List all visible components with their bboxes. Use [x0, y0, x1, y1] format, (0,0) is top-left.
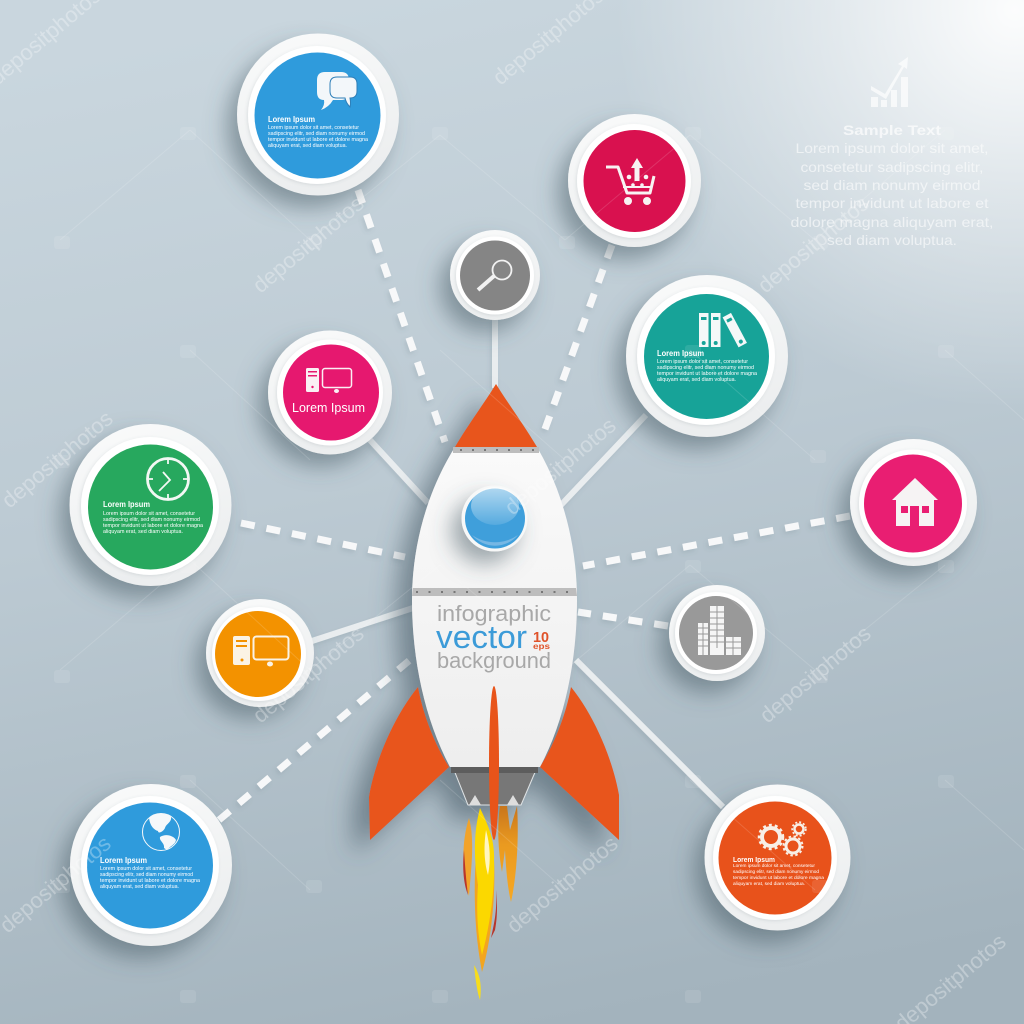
label: Lorem Ipsum: [292, 401, 365, 415]
text block: tempor invidunt ut labore et dolore magna: [733, 875, 824, 881]
watermark pattern: depositphotos: [248, 621, 369, 728]
watermark pattern: depositphotos: [0, 406, 118, 513]
connector lines: [219, 190, 850, 820]
text block: Lorem Ipsum: [657, 349, 704, 358]
rocket label: vector: [436, 619, 527, 655]
exhaust flame: [463, 806, 518, 1000]
circle: green clock: [70, 424, 232, 586]
body text: sed diam voluptua.: [827, 232, 957, 248]
nose cone: [455, 384, 537, 447]
watermark pattern: depositphotos: [753, 191, 874, 298]
text block: aliquyam erat, sed diam voluptua.: [100, 884, 179, 890]
text block: tempor invidunt ut labore et dolore magna: [100, 878, 200, 884]
icon: house: [892, 478, 938, 526]
circle: home: [850, 439, 977, 566]
icon: globe: [142, 814, 180, 850]
circle: gears: [704, 784, 850, 930]
text block: [100, 856, 200, 890]
watermark pattern: depositphotos: [755, 621, 876, 728]
icon: magnifier: [478, 260, 512, 290]
icon: growth chart: [871, 57, 908, 107]
icon: cart: [606, 158, 654, 205]
rocket label: [436, 601, 551, 673]
text block: [657, 349, 757, 383]
text block: sadipscing elitr, sed diam nonumy eirmod: [733, 869, 819, 875]
rocket label: infographic: [437, 601, 551, 626]
left fin: [369, 687, 449, 840]
text block: tempor invidunt ut labore et dolore magna: [103, 523, 203, 529]
text block: [733, 857, 824, 887]
icon: buildings: [698, 606, 741, 655]
circle: orange computer: [206, 599, 314, 707]
icon: clock: [148, 458, 188, 500]
circle: cart: [568, 114, 701, 247]
text block: aliquyam erat, sed diam voluptua.: [657, 377, 736, 383]
lower rivet band: [412, 588, 577, 596]
text block: [268, 115, 368, 149]
text block: Lorem Ipsum: [733, 857, 775, 864]
dashed connectors: [219, 190, 850, 820]
sample text block: [790, 57, 994, 248]
text block: Lorem Ipsum: [100, 856, 147, 865]
circle: chat: [237, 34, 399, 196]
text block: Lorem ipsum dolor sit amet, consetetur: [103, 511, 195, 517]
rocket: [369, 384, 619, 1000]
icon: computer: [306, 368, 352, 393]
text block: aliquyam erat, sed diam voluptua.: [733, 881, 805, 887]
watermark pattern: depositphotos: [500, 413, 621, 520]
icon: speech bubbles: [317, 72, 357, 110]
body text: tempor invidunt ut labore et: [796, 195, 989, 211]
text block: sadipscing elitr, sed diam nonumy eirmod: [268, 131, 365, 137]
heading: Sample Text: [843, 122, 941, 138]
text block: Lorem ipsum dolor sit amet, consetetur: [733, 863, 815, 869]
body text: Lorem ipsum dolor sit amet,: [796, 140, 988, 156]
circle: globe: [70, 784, 232, 946]
body text: consetetur sadipscing elitr,: [800, 159, 984, 175]
porthole: [462, 486, 528, 552]
rocket label: eps: [533, 642, 551, 651]
text block: sadipscing elitr, sed diam nonumy eirmod: [103, 517, 200, 523]
rocket silhouette with shadow: [369, 384, 619, 840]
right fin: [540, 687, 619, 840]
icon: computer: [233, 636, 288, 666]
body text: sed diam nonumy eirmod: [804, 177, 980, 193]
circle: binders: [626, 275, 788, 437]
text block: [103, 500, 203, 535]
text block: Lorem ipsum dolor sit amet, consetetur: [100, 866, 192, 872]
icon: binders: [699, 313, 747, 347]
circle: pink computer: [268, 330, 392, 454]
text block: sadipscing elitr, sed diam nonumy eirmod: [100, 872, 193, 878]
text block: Lorem Ipsum: [103, 500, 150, 509]
body: [412, 447, 577, 767]
text block: aliquyam erat, sed diam voluptua.: [268, 143, 347, 149]
centre fin: [489, 686, 499, 840]
text block: tempor invidunt ut labore et dolore magna: [657, 371, 757, 377]
watermark pattern: depositphotos: [502, 831, 623, 938]
body text: [790, 140, 994, 248]
watermark pattern: depositphotos: [248, 191, 369, 298]
body text: dolore magna aliquyam erat,: [790, 214, 994, 230]
circle: buildings: [669, 585, 765, 681]
icon: gears: [759, 822, 806, 856]
rocket label: 10: [533, 629, 549, 646]
text block: Lorem ipsum dolor sit amet, consetetur: [268, 125, 359, 131]
rocket label: background: [437, 648, 551, 673]
text block: Lorem Ipsum: [268, 115, 315, 124]
text block: aliquyam erat, sed diam voluptua.: [103, 529, 183, 535]
text block: Lorem ipsum dolor sit amet, consetetur: [657, 359, 748, 365]
solid connectors: [312, 318, 723, 807]
text block: sadipscing elitr, sed diam nonumy eirmod: [657, 365, 754, 371]
nozzle: [451, 767, 538, 805]
text block: tempor invidunt ut labore et dolore magna: [268, 137, 368, 143]
circle: search: [450, 230, 540, 320]
upper rivet band: [453, 447, 539, 453]
